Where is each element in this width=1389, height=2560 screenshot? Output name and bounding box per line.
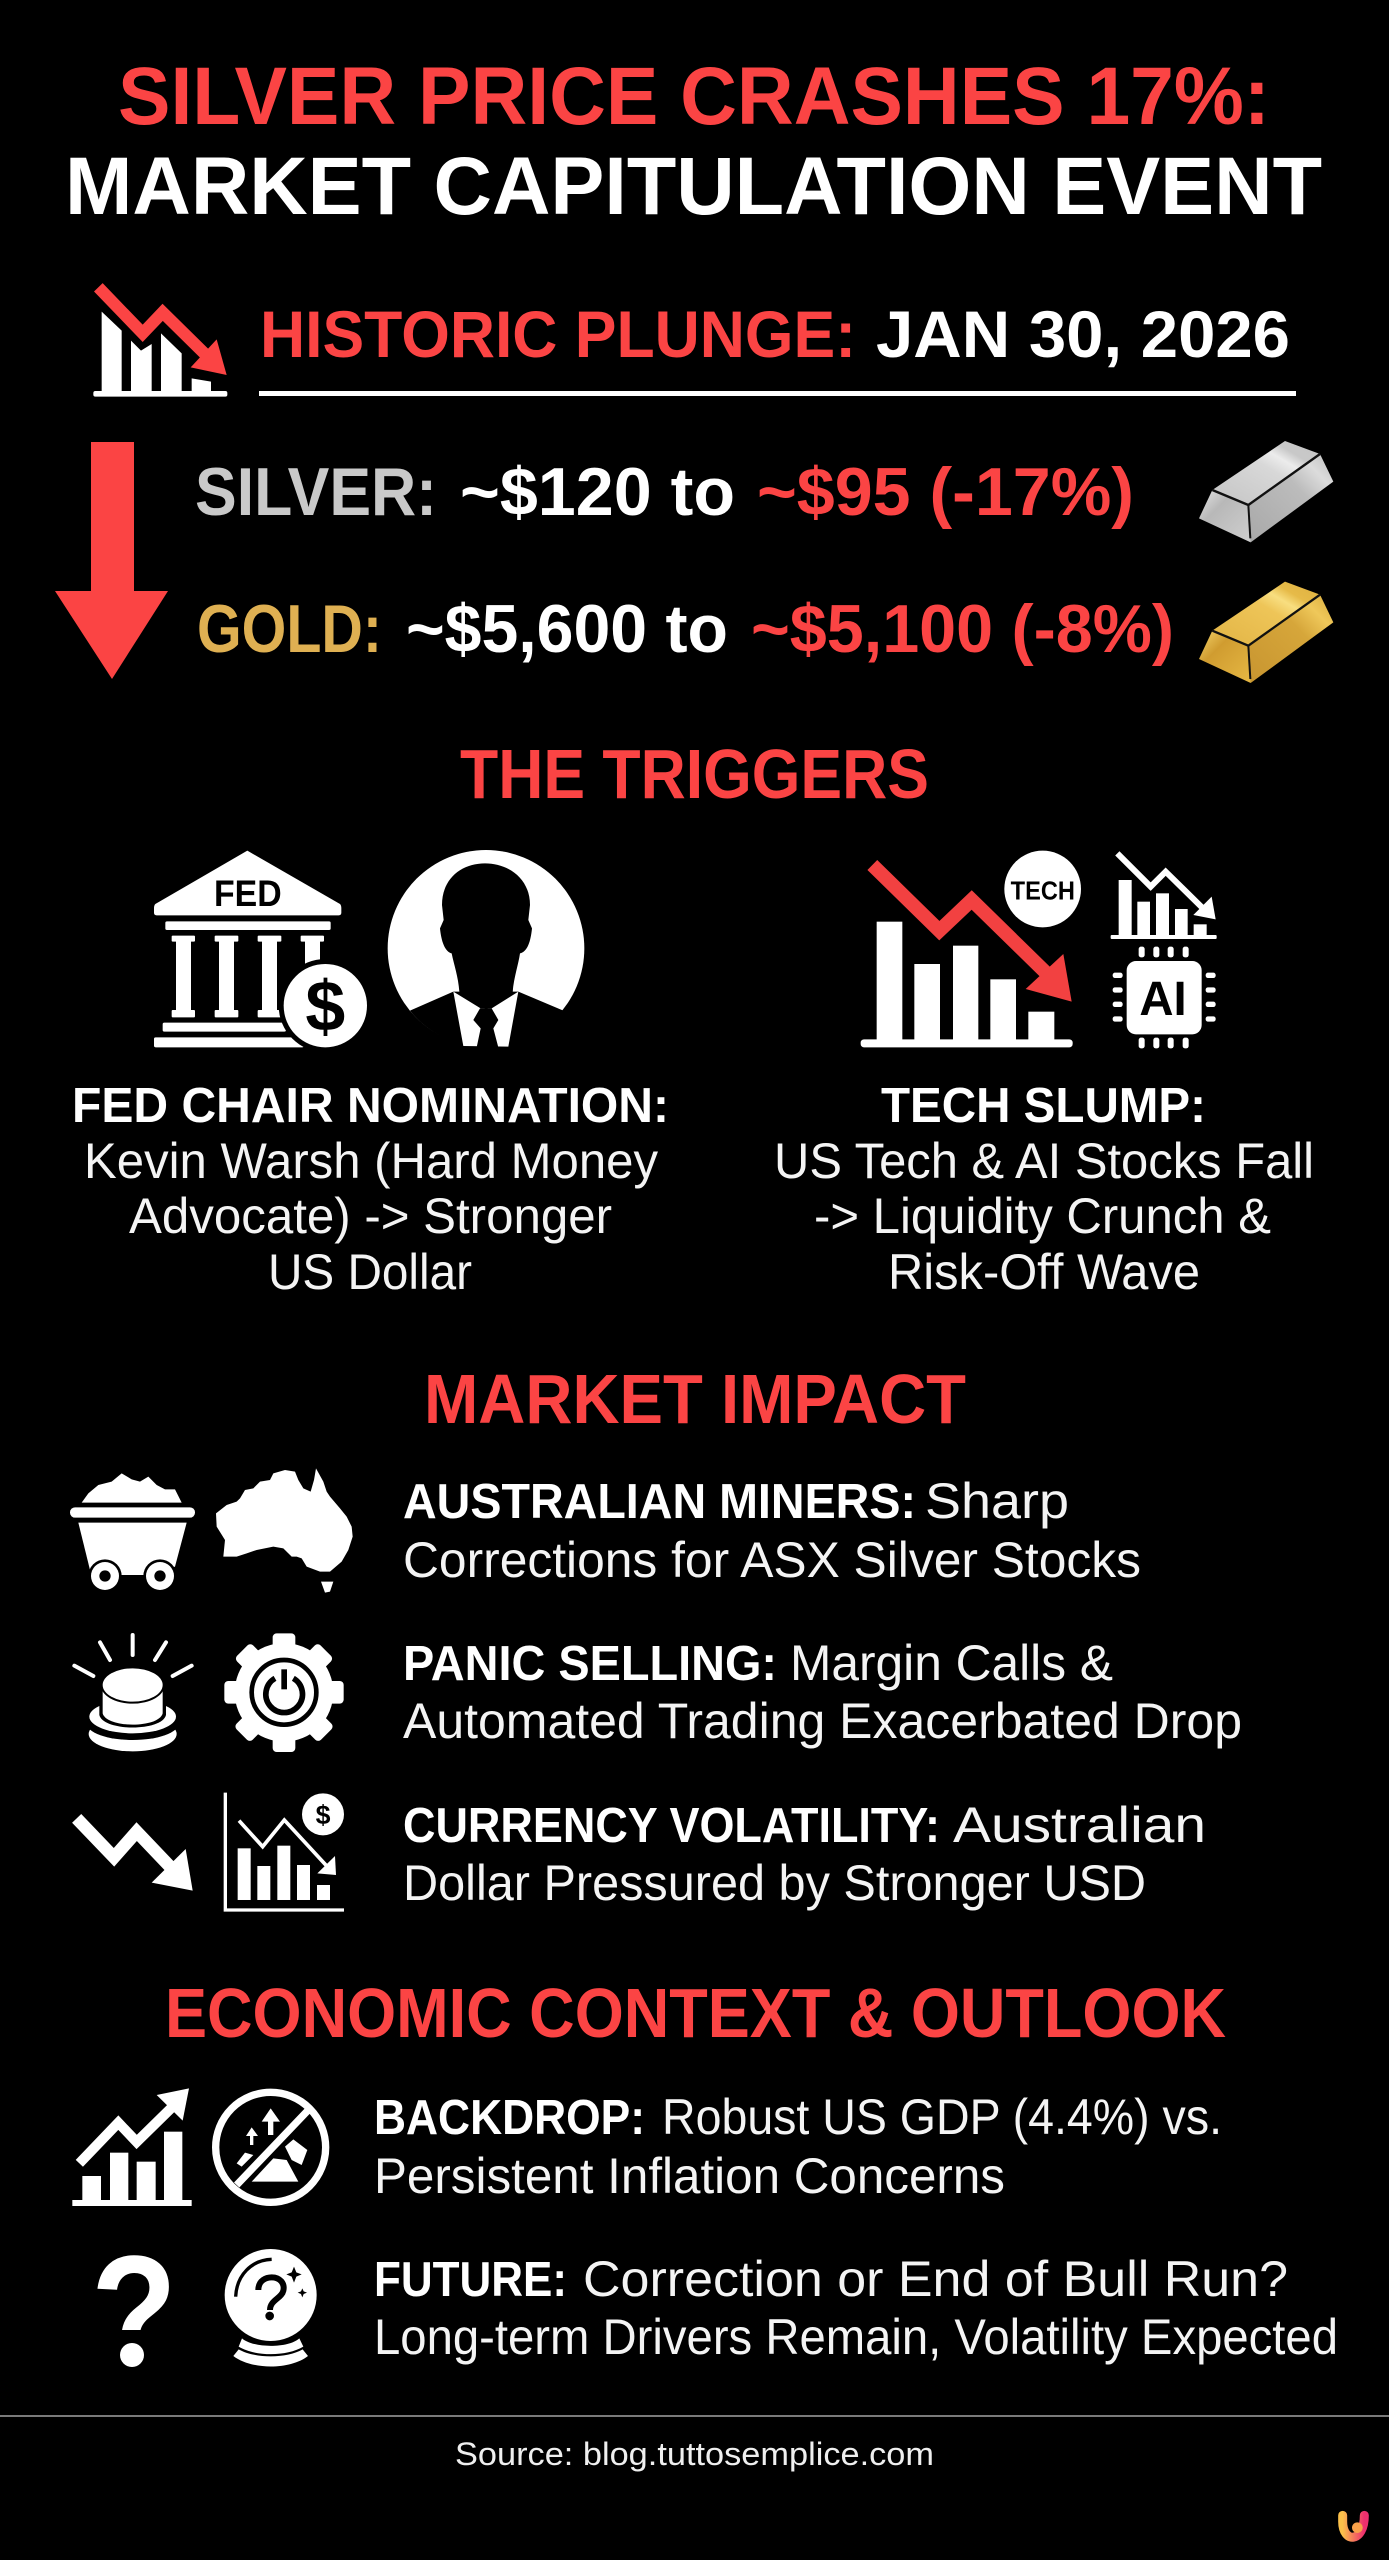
heading: historic plunge: JAN 30, 2026 [876,297,1290,371]
icon: no inflation [216,2092,326,2202]
context text: backdrop [374,2089,1222,2204]
trigger text: tech slump: -> Liquidity Crunch & [814,1188,1271,1244]
trigger text: fed chair nomination: US Dollar [268,1244,472,1300]
market text: panic selling: Margin Calls & [790,1635,1113,1691]
trigger text: tech slump: Risk-Off Wave [888,1244,1200,1300]
icon: fed building with dollar coin: $ [305,967,345,1047]
divider [0,2415,1389,2417]
context text: backdrop: BACKDROP: [374,2091,645,2145]
icon: panic button [74,1635,192,1751]
context text: backdrop: Persistent Inflation Concerns [374,2148,1005,2204]
trigger text: tech slump: US Tech & AI Stocks Fall [774,1133,1314,1189]
icon: falling chart [93,287,227,397]
silver price line: ~$95 (-17%) [757,454,1134,530]
heading: historic plunge [260,297,1290,371]
icon: small falling chart [1111,853,1217,939]
source line: Source: blog.tuttosemplice.com [455,2436,934,2472]
market text: panic selling [403,1635,1242,1749]
trigger text: tech slump [774,1079,1314,1300]
icon: currency chart: $ [316,1800,331,1830]
logo mark [1343,2515,1364,2537]
icon: rising chart [72,2088,192,2206]
context text: future: FUTURE: [374,2253,567,2307]
icon: mine cart [70,1473,195,1593]
heading: economic context and outlook: ECONOMIC CONTEXT & OUTLOOK [165,1974,1226,2052]
market text: currency volatility: CURRENCY VOLATILITY: [403,1799,940,1853]
market text: currency volatility: Australian [953,1797,1206,1853]
heading: historic plunge: HISTORIC PLUNGE: [260,297,856,371]
market text: australian miners: Corrections for ASX Silver Stocks [403,1532,1141,1588]
icon: crystal ball [225,2249,317,2366]
icon: tech badge: TECH [1011,877,1075,905]
heading: market impact: MARKET IMPACT [424,1360,966,1438]
title: MARKET CAPITULATION EVENT [65,141,1322,232]
market text: australian miners: AUSTRALIAN MINERS: [403,1475,916,1529]
title [65,51,1322,232]
icon: fed building with dollar coin [154,851,372,1052]
market text: australian miners [403,1473,1141,1588]
trigger text: fed chair nomination: Advocate) -> Stronger [129,1188,612,1244]
icon: australia map [216,1468,353,1593]
icon: AI chip [1113,947,1216,1048]
gold price line: ~$5,100 (-8%) [751,591,1174,667]
silver price line [195,454,1134,530]
market text: australian miners: Sharp [925,1473,1069,1529]
icon: silver bar [1199,441,1333,542]
gold price line: ~$5,600 to [406,591,728,667]
market text: currency volatility: Dollar Pressured by Stronger USD [403,1855,1146,1911]
icon: gear with power symbol [224,1633,344,1752]
market text: panic selling: PANIC SELLING: [403,1637,777,1691]
market text: currency volatility [403,1797,1206,1911]
arrow: big red down [55,442,168,679]
gold price line: GOLD: [197,591,382,667]
market text: panic selling: Automated Trading Exacerbated Drop [403,1693,1242,1749]
underline [259,391,1296,396]
context text: backdrop: Robust US GDP (4.4%) vs. [662,2089,1222,2145]
gold price line [197,591,1174,667]
icon: AI chip: AI [1139,972,1187,1026]
context text: future: Correction or End of Bull Run? [583,2251,1288,2307]
silver price line: ~$120 to [460,454,735,530]
title: SILVER PRICE CRASHES 17%: [118,51,1270,142]
context text: future [374,2251,1338,2365]
icon: currency chart [225,1793,344,1910]
context text: future: Long-term Drivers Remain, Volatility Expected [374,2309,1338,2365]
icon: tech chart with red arrow [861,865,1073,1047]
silver price line: SILVER: [195,454,437,530]
icon: fed building with dollar coin: FED [214,873,282,914]
trigger text: fed chair nomination: FED CHAIR NOMINATION: [72,1079,669,1133]
icon: tech badge [1004,851,1081,927]
trigger text: fed chair nomination: Kevin Warsh (Hard Money [84,1133,658,1189]
heading: the triggers: THE TRIGGERS [460,735,929,813]
icon: gold bar [1199,582,1333,683]
icon: silhouette of fed chair [388,850,584,1047]
trigger text: fed chair nomination [72,1079,669,1300]
trigger text: tech slump: TECH SLUMP: [881,1079,1206,1133]
icon: question mark: ? [91,2222,177,2401]
icon: down arrow [77,1818,193,1891]
